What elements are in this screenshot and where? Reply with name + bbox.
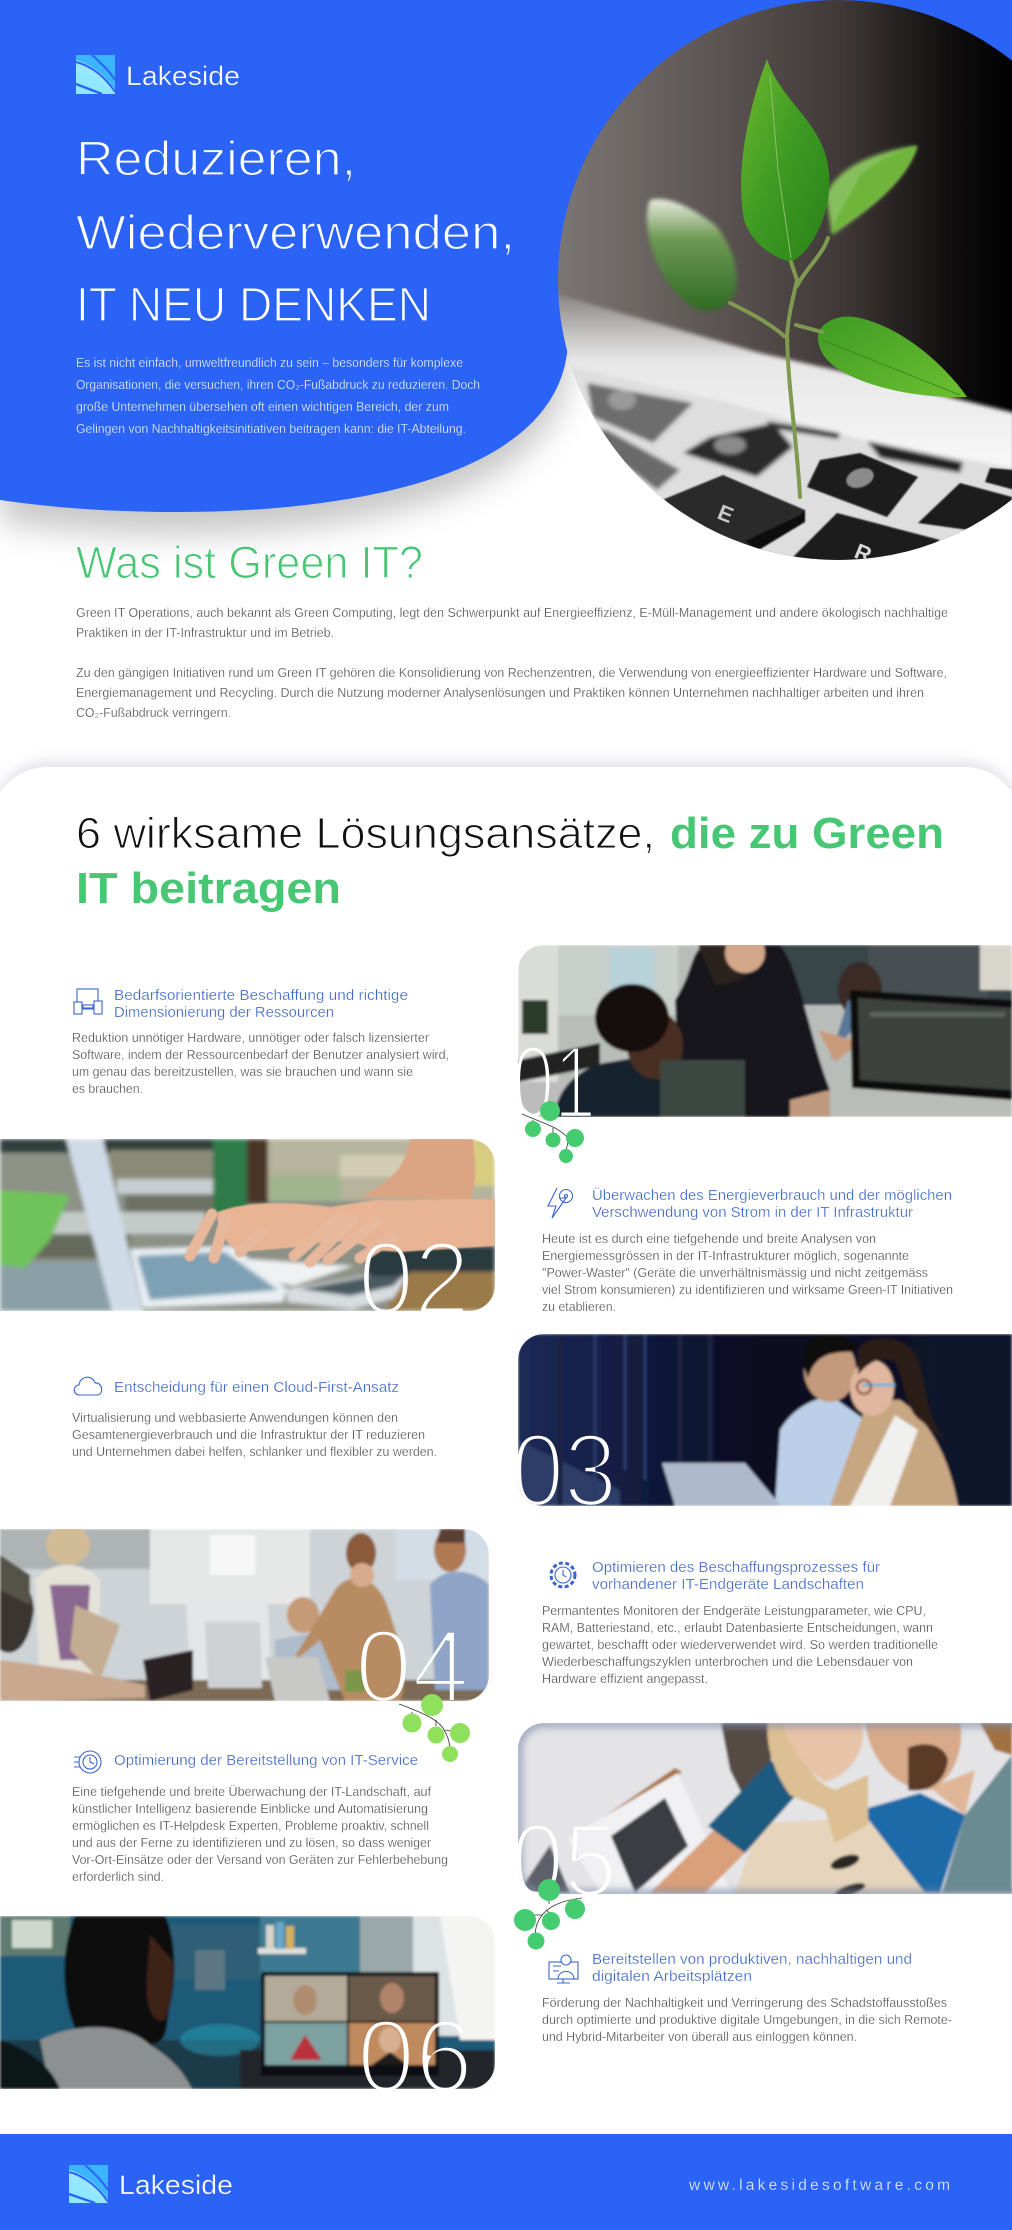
- solution 3 body: [72, 1411, 437, 1459]
- hero paragraph: Organisationen, die versuchen, ihren CO₂-Fußabdruck zu reduzieren. Doch: [76, 378, 480, 392]
- solution 2 body: Heute ist es durch eine tiefgehende und breite Analysen von: [542, 1232, 876, 1246]
- photo 2: typing on laptop: [0, 1139, 495, 1330]
- photo 3: server room couple: [518, 1334, 1012, 1506]
- logo mark: [76, 55, 115, 94]
- solution 5 body: künstlicher Intelligenz basierende Einblicke und Automatisierung: [72, 1802, 428, 1816]
- solution 1 body: [72, 1031, 449, 1096]
- heading: 6 wirksame Lösungsansätze: 6 wirksame Lösungsansätze,: [76, 809, 655, 858]
- branch decoration 5: [514, 1879, 585, 1950]
- heading: 6 wirksame Lösungsansätze: die zu Green: [670, 809, 944, 858]
- hero title: [76, 133, 515, 332]
- solution 1 heading: Dimensionierung der Ressourcen: [114, 1005, 334, 1021]
- solution 2 text: [542, 1186, 953, 1314]
- photo 1: team at monitor: [518, 945, 1012, 1117]
- hero paragraph: große Unternehmen übersehen oft einen wichtigen Bereich, der zum: [76, 400, 449, 414]
- solution 6 body: durch optimierte und produktive digitale Umgebungen, in die sich Remote-: [542, 2013, 952, 2027]
- solution 6 body: [542, 1996, 952, 2044]
- icon: devices: [74, 989, 102, 1014]
- solution 3 body: und Unternehmen dabei helfen, schlanker und flexibler zu werden.: [72, 1445, 437, 1459]
- solution 1 body: um genau das bereitzustellen, was sie brauchen und wann sie: [72, 1065, 413, 1079]
- solution 4 body: Permantentes Monitoren der Endgeräte Leistungparameter, wie CPU,: [542, 1604, 926, 1618]
- solution 4 body: Wiederbeschaffungszyklen unterbrochen und die Lebensdauer von: [542, 1655, 913, 1669]
- solution 6 heading: digitalen Arbeitsplätzen: [592, 1969, 752, 1985]
- white card background: [0, 767, 1012, 2230]
- solution 6 heading: Bereitstellen von produktiven, nachhaltigen und: [592, 1952, 912, 1968]
- solution 5 body: [72, 1785, 448, 1884]
- solution 1 text: [72, 988, 449, 1096]
- solution 1 heading: Bedarfsorientierte Beschaffung und richtige: [114, 988, 408, 1004]
- solution 2 body: "Power-Waster" (Geräte die unverhältnismässig und nicht zeitgemäss: [542, 1266, 928, 1280]
- key legend E: E: [714, 499, 737, 528]
- solution 4 body: RAM, Batteriestand, etc., erlaubt Datenbasierte Entscheidungen, wann: [542, 1621, 933, 1635]
- solution 5 body: Vor-Ort-Einsätze oder der Versand von Geräten zur Fehlerbehebung: [72, 1853, 448, 1867]
- number 03: [518, 1436, 611, 1505]
- text: Green IT description: [76, 606, 948, 720]
- solution 4 heading: vorhandener IT-Endgeräte Landschaften: [592, 1577, 864, 1593]
- text: Green IT description: Energiemanagement und Recycling. Durch die Nutzung moderner Analysenlösungen und Praktiken können Unternehmen nachhaltiger arbeiten und ihren: [76, 686, 924, 700]
- solution 6 body: Förderung der Nachhaltigkeit und Verringerung des Schadstoffausstoßes: [542, 1996, 947, 2010]
- footer band: [0, 2134, 1012, 2230]
- solution 6 heading: [592, 1952, 912, 1985]
- solution 4 body: [542, 1604, 938, 1686]
- solution 5 body: und aus der Ferne zu identifizieren und zu lösen, so dass weniger: [72, 1836, 431, 1850]
- footer url: www.lakesidesoftware.com: [688, 2177, 950, 2194]
- solution 4 heading: Optimieren des Beschaffungsprozesses für: [592, 1560, 880, 1576]
- leaf: left blurred: [647, 199, 736, 311]
- solution 2 body: zu etablieren.: [542, 1300, 616, 1314]
- solution 2 heading: Überwachen des Energieverbrauch und der möglichen: [592, 1186, 952, 1204]
- solution 2 heading: [592, 1186, 952, 1221]
- hero photo: seedling on keyboard: [555, 0, 1012, 570]
- solution 4 body: Hardware effizient angepasst.: [542, 1672, 708, 1686]
- leaf: main: [741, 59, 829, 262]
- number 01: [518, 1048, 591, 1116]
- heading: Was ist Green IT?: Was ist Green IT?: [76, 537, 423, 588]
- photo 5 edge vignette: [518, 1723, 1012, 1894]
- photo 6: video call: [0, 1916, 495, 2089]
- solution 6 body: und Hybrid-Mitarbeiter von überall aus einloggen können.: [542, 2030, 857, 2044]
- solution 4 text: [542, 1560, 938, 1686]
- footer wordmark: Lakeside: [119, 2170, 233, 2200]
- number 05: [518, 1826, 611, 1894]
- solution 3 text: [72, 1377, 437, 1459]
- logo: Lakeside: [76, 55, 240, 94]
- hero blue panel: [0, 0, 1012, 512]
- leaf: right back blurred: [826, 146, 917, 235]
- number 02: [364, 1244, 463, 1311]
- solution 3 heading: Entscheidung für einen Cloud-First-Ansatz: [114, 1380, 399, 1396]
- text: Green IT description: CO₂-Fußabdruck verringern.: [76, 706, 231, 720]
- solution 5 text: [72, 1751, 448, 1884]
- hero title: Reduzieren,: [76, 133, 356, 186]
- key legend R: R: [851, 538, 875, 568]
- stem: [730, 238, 828, 497]
- logo wordmark: Lakeside: [126, 61, 240, 91]
- solution 5 body: erforderlich sind.: [72, 1870, 164, 1884]
- solution 1 heading: [114, 988, 408, 1021]
- solution 2 body: Energiemessgrössen in der IT-Infrastrukturer möglich, sogenannte: [542, 1249, 909, 1263]
- heading: 6 wirksame Lösungsansätze: [76, 809, 944, 913]
- icon: energy bolt: [548, 1188, 572, 1218]
- solution 5 heading: Optimierung der Bereitstellung von IT-Service: [114, 1753, 418, 1769]
- solution 6 text: [542, 1952, 952, 2044]
- solution 5 body: ermöglichen es IT-Helpdesk Experten, Probleme proaktiv, schnell: [72, 1819, 429, 1833]
- photo 5: colleagues at screen: [518, 1723, 1012, 1894]
- solution 3 body: Gesamtenergieverbrauch und die Infrastruktur der IT reduzieren: [72, 1428, 425, 1442]
- footer logo mark: [69, 2165, 108, 2203]
- branch decoration 4: [399, 1694, 470, 1762]
- leaf: lower right: [818, 317, 967, 397]
- hero paragraph: [76, 356, 480, 436]
- solution 4 body: gewartet, beschafft oder wiederverwendet wird. So werden traditionelle: [542, 1638, 938, 1652]
- hero paragraph: Es ist nicht einfach, umweltfreundlich zu sein – besonders für komplexe: [76, 356, 463, 370]
- icon: remote workplace: [549, 1955, 578, 1983]
- solution 2 heading: Verschwendung von Strom in der IT Infrastruktur: [592, 1205, 913, 1221]
- text: Green IT description: Zu den gängigen Initiativen rund um Green IT gehören die Konsolidierung von Rechenzentren, die Verwendung von energieeffizienter Hardware und Software,: [76, 666, 947, 680]
- solution 3 body: Virtualisierung und webbasierte Anwendungen können den: [72, 1411, 398, 1425]
- number 06: [363, 2022, 466, 2089]
- solution 1 body: Software, indem der Ressourcenbedarf der Benutzer analysiert wird,: [72, 1048, 449, 1062]
- icon: cloud: [74, 1377, 102, 1395]
- photo 4: office team: [0, 1529, 489, 1701]
- solution 2 body: [542, 1232, 953, 1314]
- number 04: [361, 1632, 464, 1701]
- solution 2 body: viel Strom konsumieren) zu identifizieren und wirksame Green-IT Initiativen: [542, 1283, 953, 1297]
- solution 5 body: Eine tiefgehende und breite Überwachung der IT-Landschaft, auf: [72, 1785, 432, 1799]
- heading: 6 wirksame Lösungsansätze: IT beitragen: [76, 864, 341, 913]
- text: Green IT description: Green IT Operations, auch bekannt als Green Computing, legt den Schwerpunkt auf Energieeffizienz, E-Müll-Management und andere ökologisch nachhaltige: [76, 606, 948, 620]
- hero title: Wiederverwenden,: [76, 207, 515, 260]
- icon: gear: [551, 1563, 575, 1587]
- branch decoration 1: [522, 1101, 584, 1163]
- solution 1 body: Reduktion unnötiger Hardware, unnötiger oder falsch lizensierter: [72, 1031, 429, 1045]
- text: Green IT description: Praktiken in der IT-Infrastruktur und im Betrieb.: [76, 626, 334, 640]
- solution 4 heading: [592, 1560, 880, 1593]
- icon: clock: [74, 1751, 101, 1773]
- hero paragraph: Gelingen von Nachhaltigkeitsinitiativen beitragen kann: die IT-Abteilung.: [76, 422, 466, 436]
- solution 1 body: es brauchen.: [72, 1082, 143, 1096]
- hero title: IT NEU DENKEN: [76, 279, 431, 332]
